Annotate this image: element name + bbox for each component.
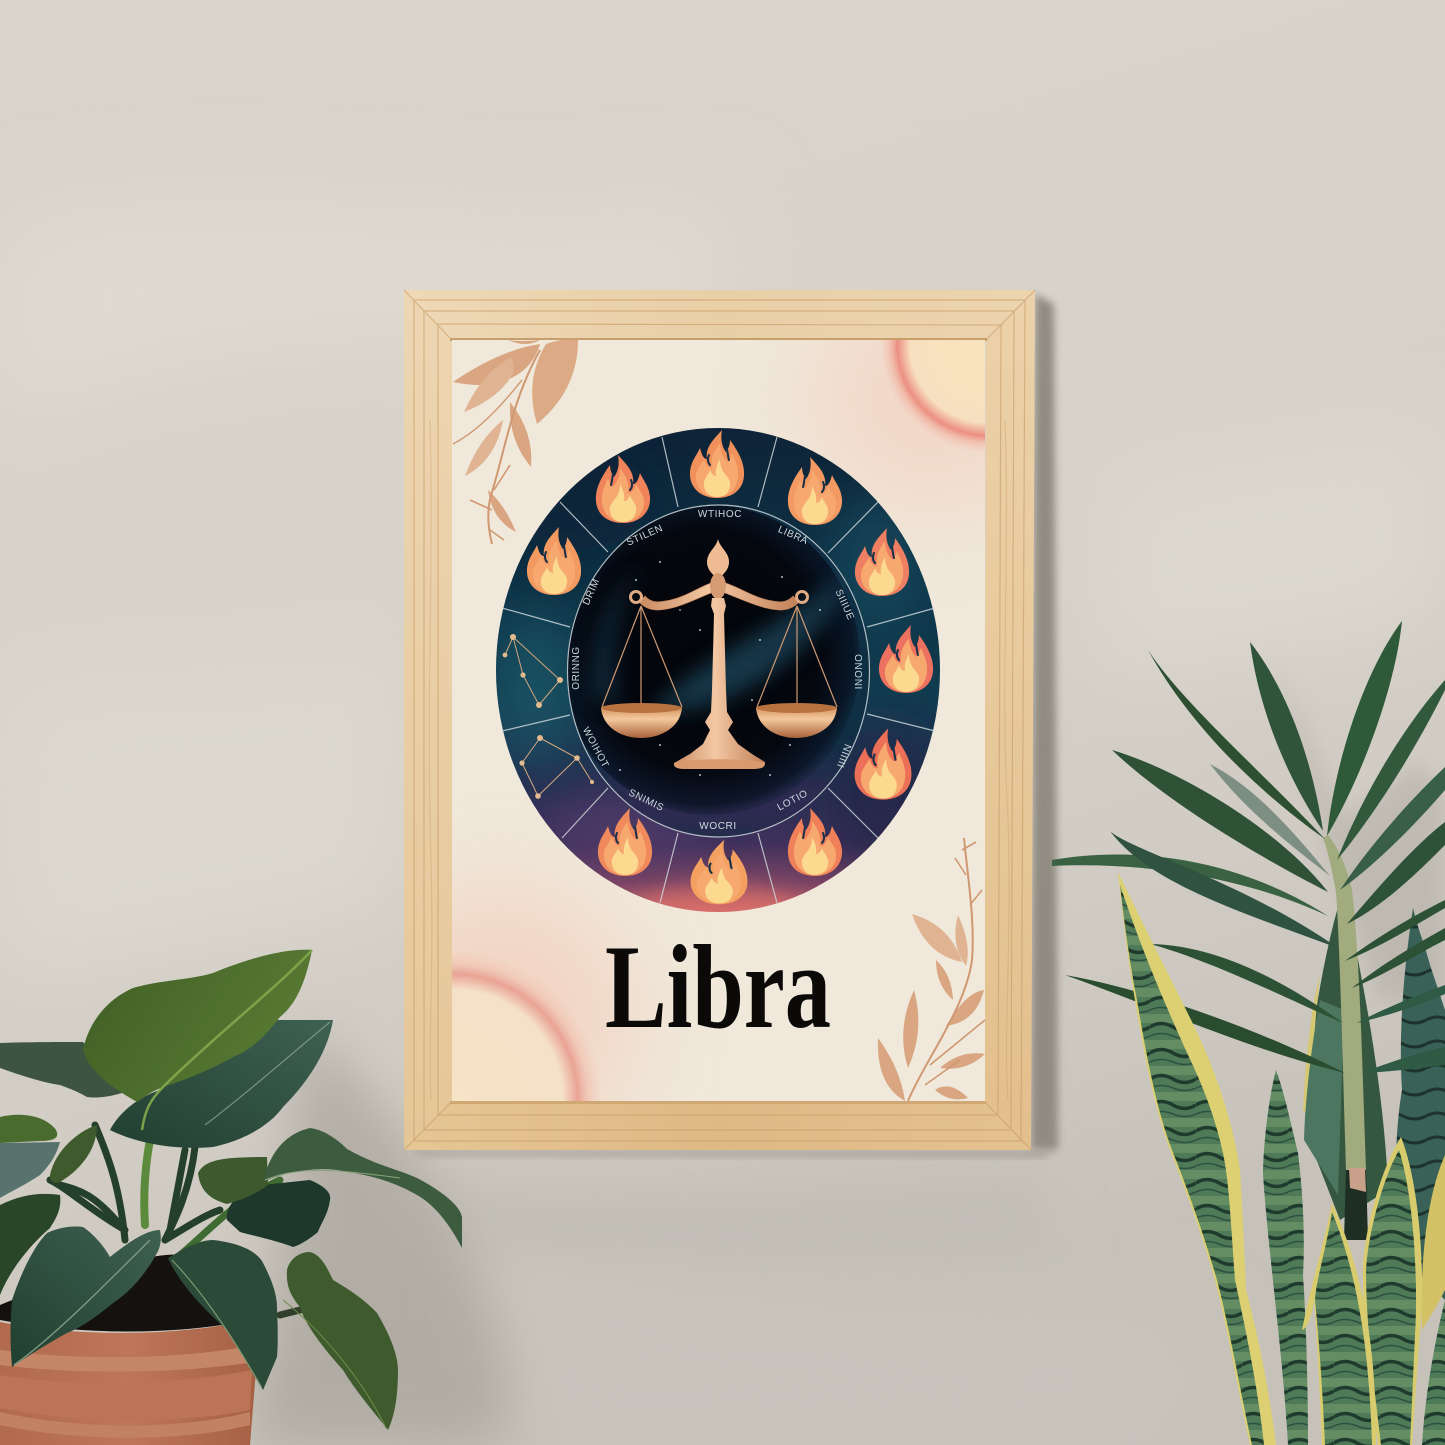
ring labels: WTIHOC [698,509,742,520]
ring labels: SIIIUE [833,588,856,622]
front big leaf [10,1227,161,1367]
ring labels [571,509,863,832]
ring labels: SNIMIS [627,787,666,814]
frame drop shadow [410,294,1058,1158]
ring labels: ORINNG [571,646,582,690]
big yellow edged snake leaf [1118,872,1276,1445]
left potted plant [0,950,462,1445]
ring labels: LOTIO [776,788,810,813]
ring labels: WOCRI [699,821,737,832]
ring labels: DRIM [581,577,602,607]
constellation lower [519,735,594,799]
botanical sprig bottom right [878,838,985,1101]
low left leaf [0,1194,60,1295]
big bright leaf [83,950,312,1102]
right snake plant and palm [1052,621,1445,1445]
right yellow back leaf [1422,1155,1445,1330]
palm shadow on wall [1270,650,1445,1000]
back leaf: left [0,1042,122,1098]
far right corner leaf [1422,1300,1445,1445]
small oval leaf [50,1125,97,1183]
lower center leaf [168,1240,278,1390]
pot [0,1322,258,1445]
ring labels: STILEN [625,523,665,549]
beam end curls [630,592,808,602]
ring and dividers [502,437,935,903]
finial [707,539,729,577]
right front snake leaf [1363,1137,1422,1445]
oval rear leaf [198,1157,268,1204]
palm stem [1323,835,1366,1170]
centre back snake leaf [1305,890,1388,1220]
nebula clouds [490,450,930,938]
libra scale [601,539,837,769]
watercolor sun top right [884,340,985,449]
small olive leaf [0,1115,57,1143]
left pan [601,703,682,738]
center dark disc [560,505,870,840]
ring labels: NIIIII [834,742,853,769]
right pan [756,703,837,738]
wooden frame [404,290,1035,1150]
constellation upper [503,634,563,708]
dark rear leaf [227,1180,330,1247]
dark back snake leaf [1395,908,1445,1300]
title: Libra [605,920,831,1053]
grey green leaf [0,1142,60,1198]
olive lower right leaf [287,1252,398,1430]
drooping right leaf [263,1128,462,1248]
center boss [710,573,726,599]
centre front snake leaf [1302,1203,1376,1445]
flames [527,430,933,904]
ring labels: LIBRA [776,524,810,547]
palm fronds [1052,621,1445,1073]
ring labels: ONONI [852,654,863,690]
soil [0,1254,240,1332]
narrow mid snake leaf [1263,1070,1308,1445]
stems [50,1087,300,1315]
column [674,598,765,769]
base lip [674,759,765,769]
back leaf: dark right [110,1020,333,1148]
star specks [619,561,821,776]
poster paper [452,340,985,1101]
plant shadow on wall [250,1030,508,1445]
hanging strings [602,606,837,712]
ring labels: WOIHOT [580,726,611,770]
watercolor sun bottom left [452,958,596,1101]
botanical sprig top left [453,340,578,544]
zodiac wheel [490,428,940,938]
beam [639,582,799,610]
